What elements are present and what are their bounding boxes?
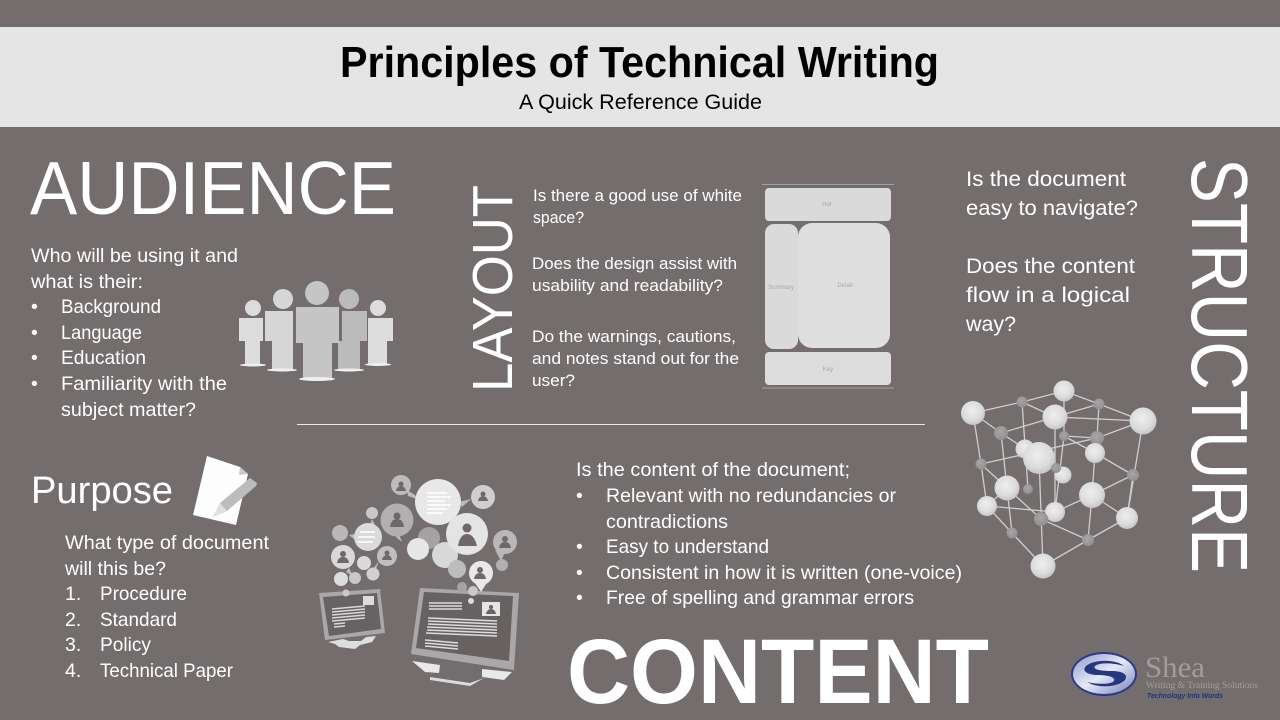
text block: content checklist: Is the content of the document; <box>576 459 850 481</box>
heading: structure: STRUCTURE <box>1175 158 1264 573</box>
text block: structure questions: flow in a logical <box>966 284 1130 307</box>
text block: audience questions: • <box>31 322 38 344</box>
text block: purpose questions <box>64 532 270 682</box>
text block: layout questions: user? <box>532 371 575 390</box>
small monitor <box>319 589 385 649</box>
text block: content checklist: Free of spelling and grammar errors <box>606 587 914 609</box>
text block: structure questions: way? <box>965 313 1016 336</box>
text block: audience questions: Who will be using it and <box>31 245 238 267</box>
text block: audience questions: • <box>31 296 38 318</box>
text block: audience questions: Education <box>61 347 146 369</box>
logo: Shea Writing and Training Solutions <box>1071 651 1259 700</box>
text block: audience questions: Familiarity with the <box>61 373 227 395</box>
heading: audience: AUDIENCE <box>30 146 396 230</box>
text block: content checklist: Relevant with no redundancies or <box>606 485 896 507</box>
text block: audience questions: • <box>31 373 38 395</box>
text block: layout questions: and notes stand out for the <box>532 349 739 368</box>
text block: layout questions: space? <box>533 208 584 227</box>
text block: audience questions <box>30 245 238 421</box>
icon: page layout diagram: Key <box>823 367 833 373</box>
text block: audience questions: Background <box>61 296 161 318</box>
text block: structure questions: Does the content <box>966 255 1135 278</box>
title banner <box>0 27 1280 127</box>
text block: purpose questions: What type of document <box>65 532 270 554</box>
icon: group of people <box>239 281 393 381</box>
text block: audience questions: what is their: <box>30 271 143 293</box>
icon: page layout diagram <box>762 184 894 388</box>
text block: layout questions: Do the warnings, cautions, <box>532 327 736 346</box>
text block: audience questions: Language <box>61 322 142 344</box>
text block: audience questions: • <box>31 347 38 369</box>
icon: crystal lattice structure <box>961 380 1156 578</box>
icon: page layout diagram: Detail <box>837 283 853 289</box>
subtitle: A Quick Reference Guide <box>519 91 762 114</box>
text block: purpose questions: 3. <box>65 634 81 656</box>
bubbles <box>331 475 517 604</box>
icon: page layout diagram: Summary <box>768 285 794 291</box>
text block: purpose questions: 4. <box>65 660 81 682</box>
text block: content checklist: • <box>576 562 583 584</box>
icon: computers with content bubbles <box>319 475 519 686</box>
text block: content checklist: • <box>576 536 583 558</box>
text block: purpose questions: will this be? <box>64 558 166 580</box>
logo: Shea Writing and Training Solutions: Technology Into Words <box>1147 691 1223 700</box>
text block: purpose questions: 2. <box>65 609 81 631</box>
heading: purpose: Purpose <box>31 470 173 512</box>
text block: layout questions: Does the design assist with <box>532 254 737 273</box>
text block: structure questions: Is the document <box>966 168 1126 191</box>
text block: purpose questions: Policy <box>100 634 151 656</box>
icon: paper and pencil <box>193 456 257 525</box>
text block: layout questions: Is there a good use of white <box>533 186 742 205</box>
text block: structure questions <box>965 168 1138 336</box>
logo: Shea Writing and Training Solutions: Shea <box>1145 651 1205 684</box>
text block: content checklist: • <box>576 587 583 609</box>
large monitor <box>411 588 519 686</box>
text block: audience questions: subject matter? <box>61 399 196 421</box>
text block: purpose questions: Procedure <box>100 583 187 605</box>
text block: purpose questions: 1. <box>65 583 81 605</box>
text block: content checklist <box>576 459 962 609</box>
text block: layout questions: usability and readability? <box>532 276 723 295</box>
text block: purpose questions: Technical Paper <box>100 660 233 682</box>
text block: layout questions <box>532 186 742 390</box>
text block: content checklist: Consistent in how it is written (one-voice) <box>606 562 962 584</box>
text block: purpose questions: Standard <box>100 609 177 631</box>
text block: structure questions: easy to navigate? <box>966 197 1138 220</box>
icon: page layout diagram: Hdr <box>822 202 832 208</box>
heading: content: CONTENT <box>567 621 989 720</box>
heading: layout: LAYOUT <box>461 185 525 392</box>
divider <box>297 424 925 426</box>
text block: content checklist: Easy to understand <box>606 536 769 558</box>
text block: content checklist: contradictions <box>606 511 728 533</box>
title: Principles of Technical Writing <box>340 38 939 87</box>
logo: Shea Writing and Training Solutions: Writing & Training Solutions <box>1146 680 1259 690</box>
text block: content checklist: • <box>576 485 583 507</box>
